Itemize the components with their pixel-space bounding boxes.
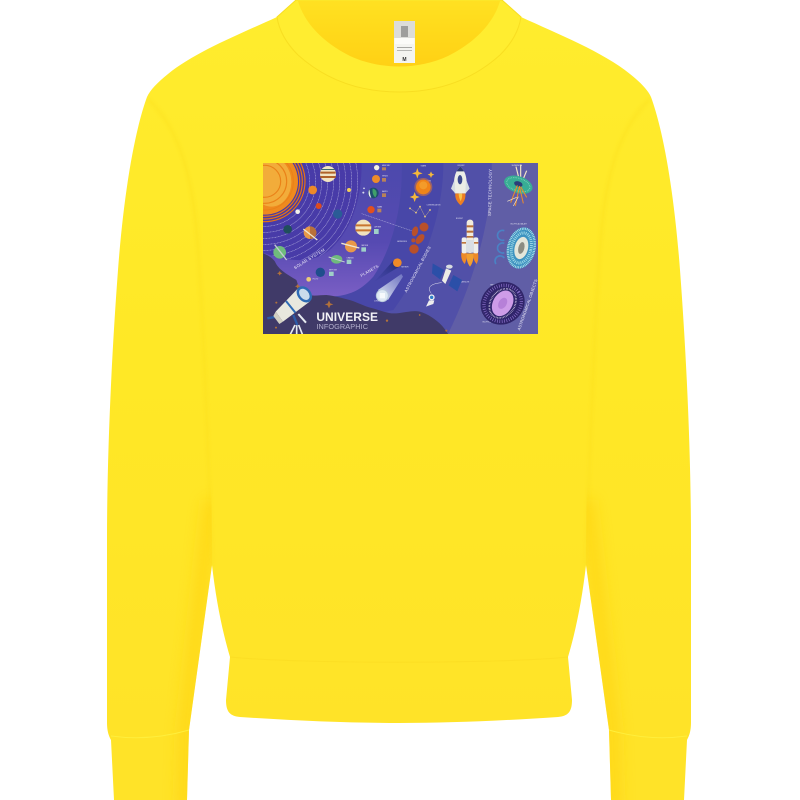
galaxy: supernova disc (502, 165, 535, 206)
left sleeve shading (184, 500, 211, 800)
planet: large striped (355, 220, 371, 236)
planet: red (316, 203, 322, 209)
panel: astronomical objects band (448, 163, 538, 334)
planet: ringed saturn (341, 240, 359, 252)
sun (263, 163, 306, 222)
planet name labels: PLUTO (313, 278, 319, 280)
star labels and leader: METEOR (401, 266, 409, 268)
star labels and leader: CONSTELLATION (427, 204, 441, 207)
planet: ringed green small (329, 255, 345, 264)
planets list (313, 165, 391, 280)
right sleeve (558, 80, 691, 800)
telescope (267, 283, 315, 335)
panel: dark foreground hill (260, 252, 450, 337)
title: UNIVERSE (316, 310, 378, 324)
star labels and leader: ROCKET (458, 165, 465, 167)
orbits (263, 163, 358, 260)
star labels and leader: ROCKET (456, 218, 463, 220)
star labels and leader: THE GALACTIC HALO (490, 283, 508, 286)
star labels and leader: ASTEROIDS (397, 240, 408, 243)
neck label tag: M (402, 57, 407, 63)
planet name labels: VENUS (382, 176, 389, 178)
star labels and leader: ELLIPTICAL GALAXY (483, 321, 500, 324)
star labels and leader: ELLIPTICAL GALAXY (511, 222, 528, 225)
star labels and leader: SUN (427, 180, 432, 182)
satellite (432, 263, 462, 291)
planet: pluto (306, 277, 311, 282)
label: space technology: SPACE TECHNOLOGY (487, 169, 493, 216)
star: sun (414, 178, 432, 196)
planet name labels: URANUS (347, 256, 355, 259)
comet (376, 274, 403, 302)
panel: space technology band (385, 163, 492, 334)
label: astronomical objects: ASTRONOMICAL OBJECTS (516, 278, 539, 331)
star labels and leader: THE NUCLEUS (483, 308, 495, 310)
constellation (409, 206, 431, 217)
stars on hill (275, 271, 447, 332)
meteor (380, 258, 402, 278)
planet: white (295, 209, 300, 214)
label: astronomical bodies: ASTRONOMICAL BODIES (403, 245, 432, 293)
star labels and leader: THE GALAXY (483, 313, 494, 316)
star labels and leader: COMET (374, 300, 380, 302)
right sleeve shading (587, 500, 614, 800)
label: planets: PLANETS (359, 263, 380, 278)
planet: neptune (316, 268, 325, 277)
planet: blue (333, 209, 342, 219)
stars (410, 168, 434, 202)
star labels and leader: STARS (421, 165, 427, 168)
star labels and leader: SATELLITE (461, 281, 470, 284)
body of sweatshirt (147, 0, 651, 723)
left sleeve (107, 80, 240, 800)
star labels and leader: SUPERNOVA (512, 164, 523, 167)
galaxy: spiral (502, 224, 540, 272)
planet name labels: JUPITER (374, 227, 382, 229)
gauges (495, 230, 504, 264)
sweatshirt (107, 0, 691, 800)
planet name labels (313, 165, 391, 280)
planet: teal (283, 225, 292, 234)
printed universe infographic (263, 163, 538, 334)
neck label tag (394, 21, 415, 63)
planet: orange (308, 186, 317, 194)
collar (277, 0, 521, 92)
planet: striped giant (320, 166, 336, 182)
seams (149, 100, 649, 662)
astronaut (426, 283, 442, 307)
panel: solar system band (260, 160, 362, 260)
planet name labels: SATURN (361, 244, 369, 247)
subtitle: INFOGRAPHIC (316, 322, 369, 331)
planet name labels: MERCURY (382, 165, 391, 167)
planet: ringed orange (303, 226, 317, 240)
rocket one (451, 167, 470, 205)
star labels and leader (374, 164, 528, 324)
panel: planets band (263, 193, 400, 296)
planet: yellow (347, 188, 351, 192)
label: solar system: SOLAR SYSTEM (293, 247, 326, 270)
rocket two (461, 220, 478, 267)
planet name labels: NEPTUNE (329, 269, 338, 271)
galaxy: purple (472, 273, 533, 333)
inside of neck (298, 1, 500, 66)
asteroids (409, 222, 428, 254)
planet: ringed green (273, 245, 287, 260)
planet name labels: MARS (377, 205, 383, 208)
planet name labels: EARTH (382, 190, 388, 193)
panel: astronomical bodies band (337, 163, 443, 312)
